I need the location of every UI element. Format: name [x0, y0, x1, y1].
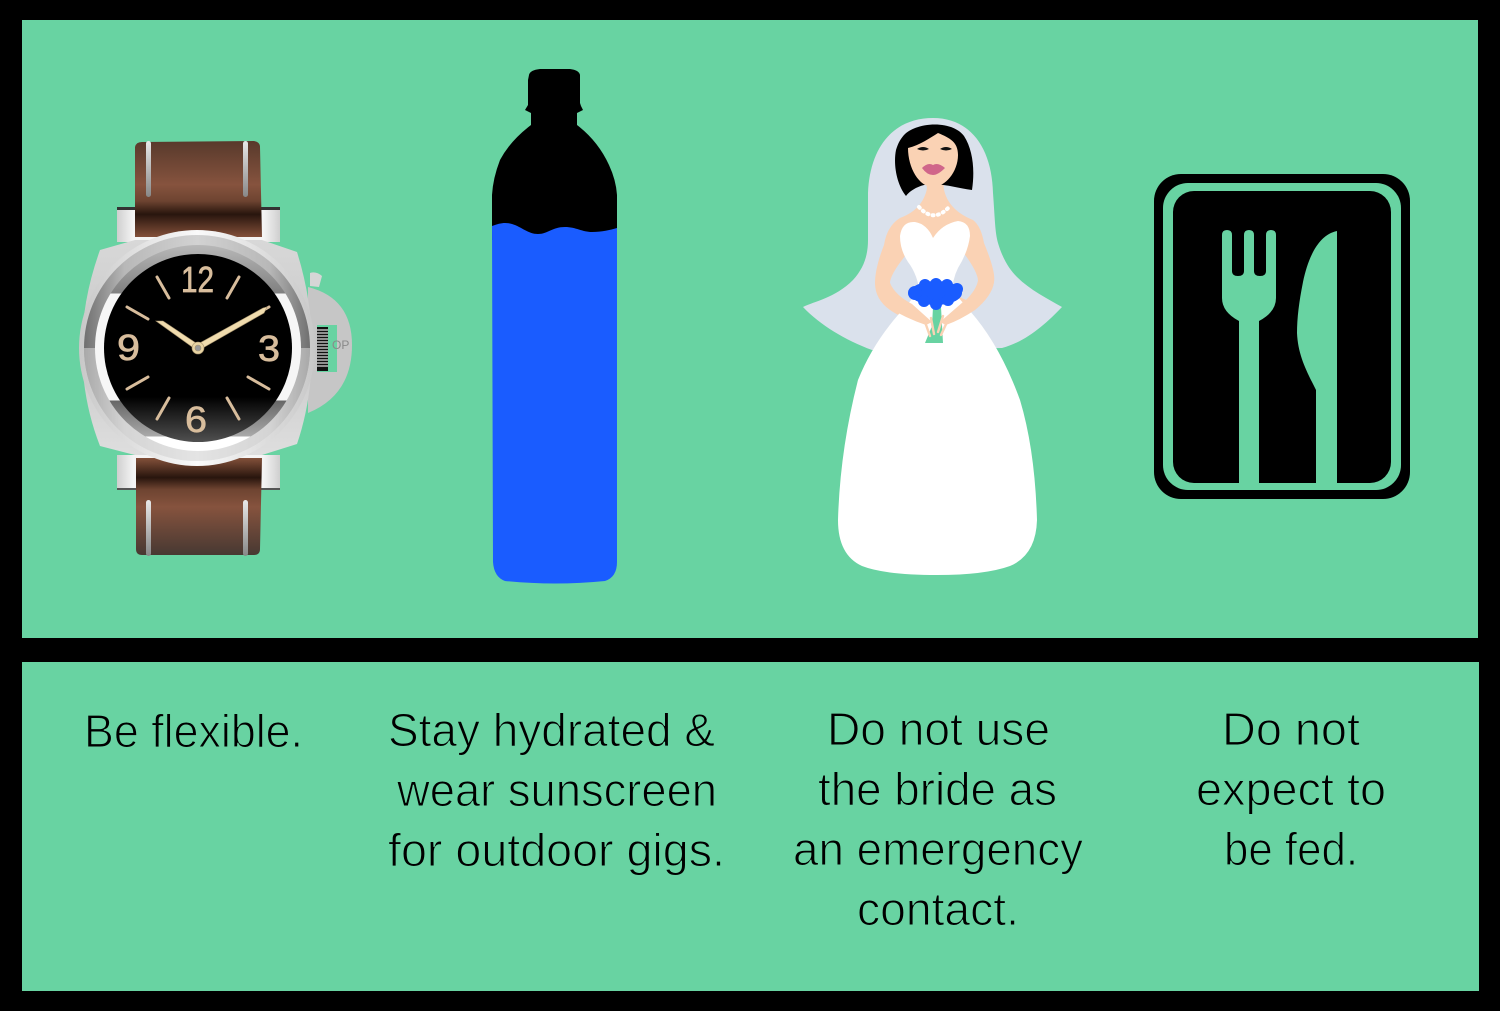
watch case — [82, 240, 312, 455]
numerals: 6 — [185, 399, 207, 440]
caption: stay hydrated — [388, 704, 725, 876]
caption: fed: Do not — [1222, 703, 1360, 755]
hour markers — [127, 277, 269, 419]
bodice — [900, 221, 970, 295]
necklace — [919, 206, 950, 215]
caption: bride — [793, 703, 1083, 935]
icon: bride — [803, 118, 1062, 575]
panel: illustrations — [22, 20, 1478, 638]
icon: wristwatch — [79, 141, 352, 556]
caption: bride: an emergency — [793, 823, 1083, 875]
caption: bride: contact. — [857, 883, 1019, 935]
hair — [895, 124, 973, 196]
caption: fed: expect to — [1196, 763, 1386, 815]
eyes — [917, 147, 952, 150]
numerals — [117, 259, 280, 440]
bouquet — [908, 278, 963, 310]
icon: fork and knife sign — [1154, 174, 1410, 499]
numerals: 9 — [117, 327, 140, 368]
caption: fed — [1196, 703, 1386, 875]
body and shoulders — [875, 180, 994, 328]
caption: stay hydrated: for outdoor gigs. — [388, 824, 725, 876]
bouquet stem — [925, 307, 943, 343]
lugs — [117, 207, 280, 490]
strap bottom — [136, 458, 262, 556]
caption: bride: Do not use — [827, 703, 1050, 755]
numerals: 12 — [181, 259, 214, 300]
icon: water bottle — [492, 69, 617, 584]
knife — [1297, 231, 1337, 484]
crown guard: OP — [332, 338, 349, 352]
strap top — [135, 141, 262, 237]
fork — [1222, 230, 1276, 484]
numerals: 3 — [258, 328, 280, 369]
panel: captions — [22, 662, 1479, 991]
lips — [922, 164, 945, 175]
bezel — [79, 230, 315, 466]
caption: stay hydrated: wear sunscreen — [396, 764, 717, 816]
veil seen between arms — [890, 252, 978, 304]
hands — [156, 307, 267, 354]
caption: bride: the bride as — [818, 763, 1057, 815]
caption: be flexible: Be flexible. — [84, 705, 303, 757]
veil — [803, 118, 1062, 350]
fingers — [925, 316, 947, 336]
dress skirt — [838, 290, 1037, 575]
forearms — [875, 281, 994, 325]
crown guard — [308, 272, 352, 413]
bottle top — [492, 69, 617, 240]
neck — [926, 176, 944, 205]
dial — [104, 254, 292, 442]
caption: fed: be fed. — [1224, 823, 1358, 875]
face — [908, 133, 958, 187]
caption: stay hydrated: Stay hydrated & — [388, 704, 715, 756]
water — [492, 223, 617, 584]
